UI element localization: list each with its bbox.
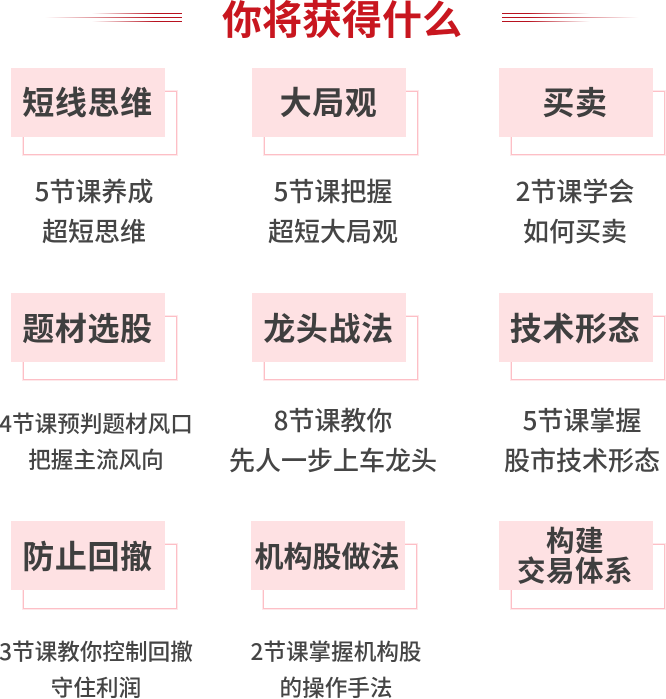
text: 5节课把握 [274, 172, 392, 209]
text: 5节课掌握 [523, 401, 641, 438]
text: 防止回撤 [22, 532, 153, 578]
panel: 机构股做法 [250, 521, 422, 699]
text: 超短大局观 [268, 212, 398, 249]
panel: 技术形态 [499, 293, 666, 478]
text: 3节课教你控制回撤 [0, 634, 193, 667]
text: 8节课教你 [274, 401, 392, 438]
panel: 防止回撤 [0, 521, 193, 699]
text: 短线思维 [22, 78, 153, 124]
text: 股市技术形态 [504, 441, 660, 478]
text: 2节课学会 [516, 172, 634, 209]
text: 4节课预判题材风口 [0, 406, 193, 439]
text: 把握主流风向 [28, 442, 164, 475]
panel: 短线思维 [11, 68, 178, 249]
text: 2节课掌握机构股 [250, 634, 422, 667]
right title decoration [502, 13, 635, 22]
panel: 题材选股 [0, 293, 193, 475]
text: 先人一步上车龙头 [229, 441, 437, 478]
text: 龙头战法 [263, 304, 394, 350]
text: 构建 [546, 518, 604, 560]
text: 超短思维 [42, 212, 146, 249]
text: 交易体系 [517, 548, 633, 590]
text: 技术形态 [510, 304, 640, 350]
text: 买卖 [542, 78, 608, 124]
text: 机构股做法 [254, 534, 400, 576]
panel: 大局观 [252, 68, 419, 249]
panel: 构建交易体系 [499, 518, 666, 610]
text: 大局观 [280, 78, 377, 124]
panel: 龙头战法 [229, 293, 437, 478]
text: 5节课养成 [35, 172, 153, 209]
panel: 买卖 [499, 68, 666, 249]
left title decoration [49, 13, 182, 22]
text: 题材选股 [22, 304, 153, 350]
text: 如何买卖 [523, 212, 627, 249]
